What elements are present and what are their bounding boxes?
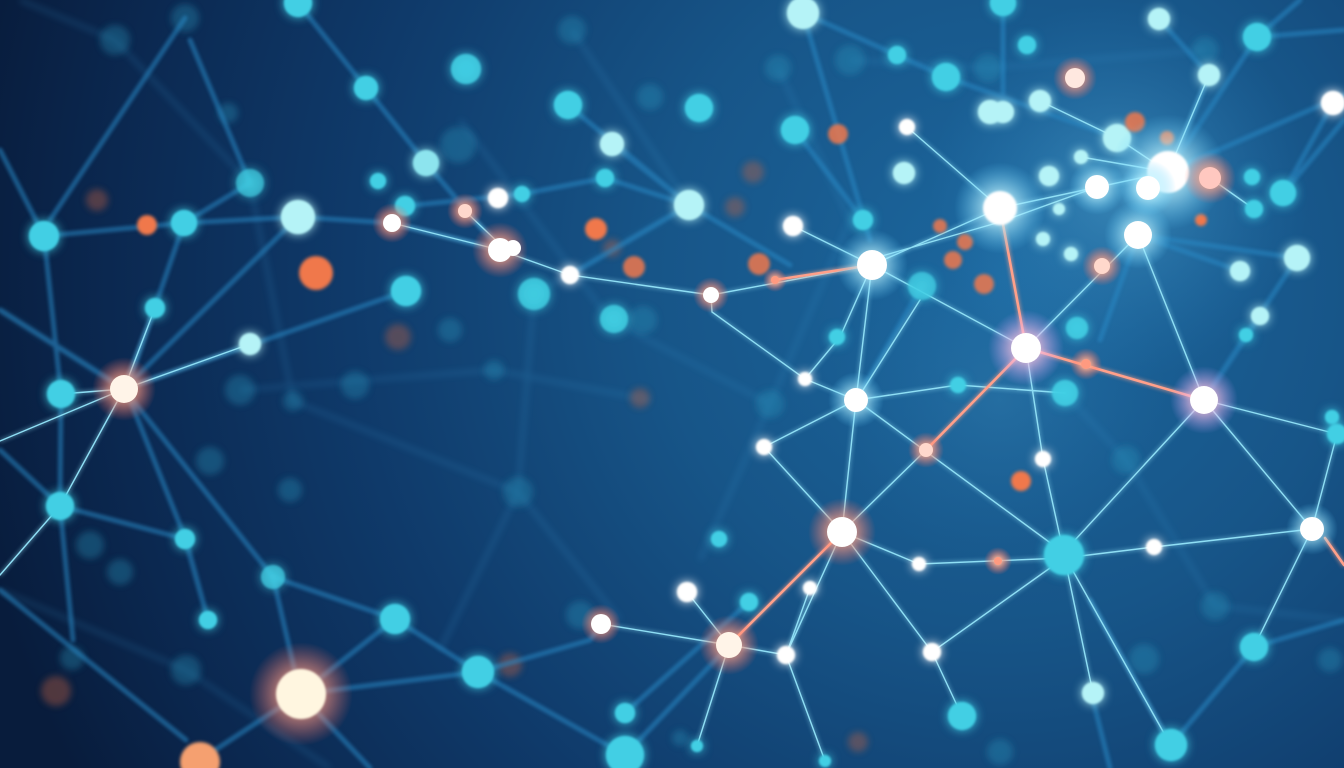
white glowing nodes: [488, 91, 1344, 664]
red highlighted connections: [729, 208, 1344, 645]
light cyan nodes: [239, 0, 1310, 704]
red glowing nodes: [92, 56, 1238, 746]
haze behind bright cluster: [830, 0, 1310, 570]
orange nodes: [137, 112, 1207, 768]
